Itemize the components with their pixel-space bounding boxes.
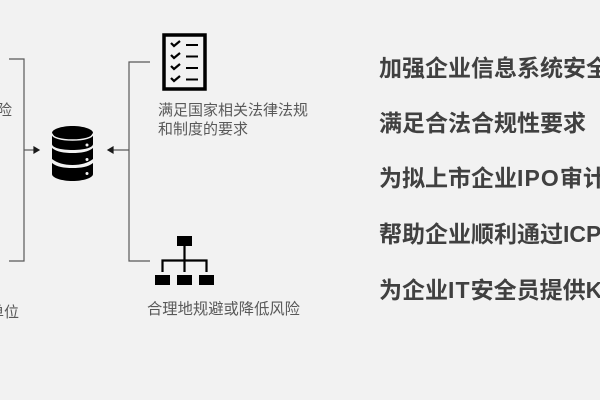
left bracket: [9, 58, 40, 262]
icon: organization chart: [155, 236, 214, 285]
benefit 3: 为拟上市企业IPO审计: [379, 165, 600, 191]
benefit 5: 为企业IT安全员提供K: [379, 277, 600, 303]
risk text: 合理地规避或降低风险: [147, 300, 300, 318]
benefit 4: 帮助企业顺利通过ICP: [379, 221, 600, 247]
requirement text: 满足国家相关法律法规: [158, 102, 308, 118]
requirement text: [158, 102, 308, 138]
icon: database: [52, 126, 93, 181]
requirement text: 和制度的要求: [158, 121, 248, 138]
benefit 2: 满足合法合规性要求: [379, 110, 586, 136]
right bracket: [107, 61, 150, 262]
icon: checklist: [162, 33, 207, 91]
